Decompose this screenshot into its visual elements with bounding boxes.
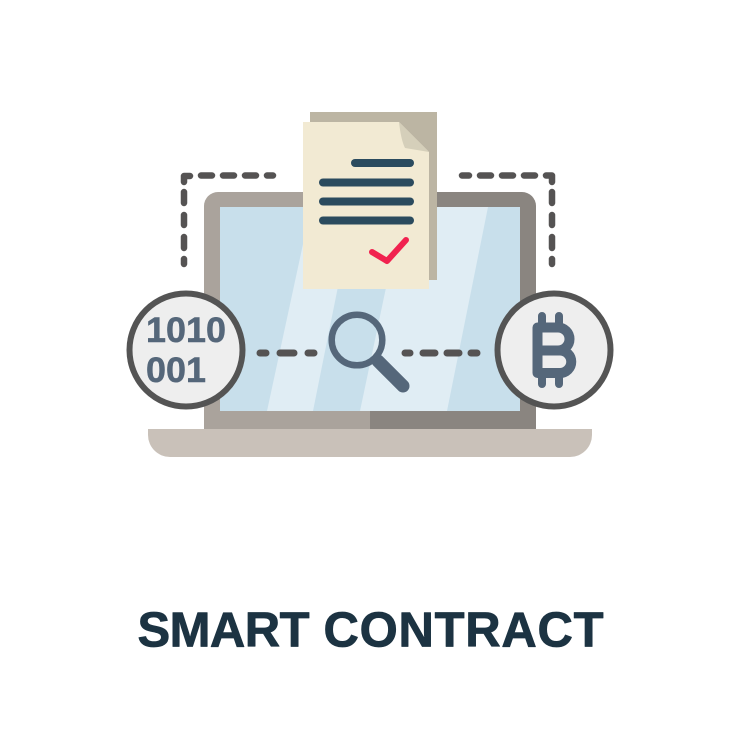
dashed connector: top right [462, 176, 552, 264]
icon: red check mark [372, 240, 406, 261]
title: SMART [138, 604, 310, 658]
icon: bitcoin symbol [538, 316, 571, 384]
document [303, 112, 437, 289]
binary text: 1010 [146, 311, 226, 350]
screen glare stripes [267, 207, 488, 411]
dashed connector: magnifier to right circle [405, 350, 477, 356]
binary text: 001 [146, 351, 206, 390]
document back sheet [310, 112, 437, 280]
title: CONTRACT [324, 604, 604, 658]
binary circle outline [130, 294, 242, 406]
laptop base [148, 429, 592, 457]
laptop lid left half [204, 192, 370, 430]
bitcoin circle outline [498, 294, 610, 406]
laptop [148, 192, 592, 457]
document front sheet [303, 122, 429, 289]
title [138, 604, 604, 658]
bitcoin circle [498, 294, 610, 406]
dashed connector: top left [184, 176, 273, 264]
laptop lid right half [370, 192, 536, 430]
binary circle [130, 294, 242, 406]
binary text [146, 311, 226, 390]
laptop screen [220, 207, 520, 411]
document text lines [323, 163, 410, 220]
dashed connector: left circle to magnifier [260, 350, 314, 356]
icon: magnifying glass [332, 315, 403, 386]
document corner fold [399, 122, 429, 152]
